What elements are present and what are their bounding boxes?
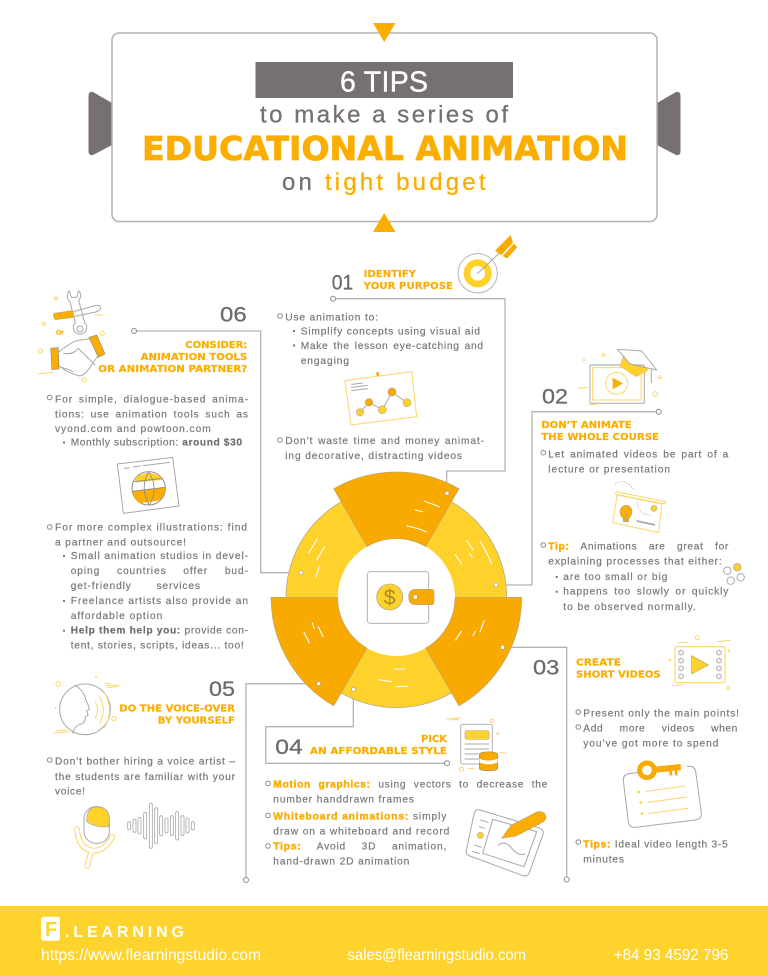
icon: tools and handshake xyxy=(39,291,105,382)
icon: browser globe xyxy=(117,457,179,513)
heading 03 xyxy=(576,658,661,680)
heading 01: IDENTIFY xyxy=(364,269,417,280)
text: complex illustrations: Help them help you: provide con- xyxy=(71,626,248,637)
icon: target with arrow xyxy=(458,235,517,293)
icon: wallet: $ xyxy=(384,586,396,610)
number 03: 03 xyxy=(533,656,559,679)
top triangle xyxy=(373,23,396,42)
heading 06: OR ANIMATION PARTNER? xyxy=(98,364,247,375)
text: simple animations: tions: use animation tools such as xyxy=(55,409,248,420)
text: don't bother: Don’t bother hiring a voice artist – xyxy=(55,757,235,768)
text: don't waste time: ing decorative, distracting videos xyxy=(285,451,462,462)
text: let animated videos: lecture or presentation xyxy=(548,464,670,475)
panel: 06 consider tools or partner xyxy=(39,291,248,652)
connector dots xyxy=(299,491,505,691)
text: styles: Whiteboard animations: simply xyxy=(273,812,447,823)
text: use animation to xyxy=(278,312,483,367)
text: don't waste time xyxy=(278,436,484,462)
text: main points: Add more videos when xyxy=(583,723,737,734)
icon: video with graduation cap xyxy=(578,349,662,405)
logo mark xyxy=(41,917,60,941)
heading 03: SHORT VIDEOS xyxy=(576,670,661,680)
text: styles: Tips: Avoid 3D animation, xyxy=(273,841,446,852)
heading 02: DON’T ANIMATE xyxy=(541,420,632,431)
icon: four dots xyxy=(724,564,744,584)
left speaker tab xyxy=(88,92,112,155)
main title: EDUCATIONAL ANIMATION xyxy=(142,129,628,168)
text: complex illustrations: tent, stories, scripts, ideas... too! xyxy=(71,641,244,652)
heading 02 xyxy=(541,420,659,443)
heading 04 xyxy=(310,734,448,757)
text: complex illustrations: oping countries offer bud- xyxy=(71,566,248,577)
heading 06 xyxy=(98,340,247,375)
panel: 03 create short videos xyxy=(533,636,739,865)
text: styles: Motion graphics: using vectors to decrease the xyxy=(273,780,548,791)
text: main points: Present only the main points! xyxy=(583,708,739,719)
text: use animation to: engaging xyxy=(301,356,349,367)
icon: chart board xyxy=(345,372,417,425)
heading 05: BY YOURSELF xyxy=(158,716,235,726)
orange segment: lower right xyxy=(426,597,522,706)
text: ideal length: Tips: Ideal video length 3-5 xyxy=(583,839,728,850)
panel: 02 don't animate the whole course xyxy=(541,349,744,613)
text: complex illustrations xyxy=(47,523,248,652)
subtitle line: to make a series of xyxy=(260,102,508,129)
text: use animation to: Simplify concepts using visual aid xyxy=(301,327,480,338)
email: sales@flearningstudio.com xyxy=(348,947,526,964)
text: complex illustrations: affordable option xyxy=(71,611,162,622)
text: don't bother xyxy=(47,757,236,798)
logo wordmark: .LEARNING xyxy=(65,924,184,941)
text: don't waste time: Don’t waste time and money animat- xyxy=(285,436,484,447)
text: tip: happens too slowly or quickly xyxy=(563,587,729,598)
text: tip: Tip: Animations are great for xyxy=(548,542,729,553)
footer band xyxy=(0,906,768,976)
text: let animated videos xyxy=(541,449,729,475)
text: simple animations: vyond.com and powtoon.com xyxy=(55,424,211,435)
text: complex illustrations: get-friendly services xyxy=(71,581,200,592)
text: simple animations: For simple, dialogue-based anima- xyxy=(55,394,248,405)
logo mark: F xyxy=(45,919,57,941)
icon: lightbulb board xyxy=(613,481,666,533)
text: complex illustrations: Small animation studios in devel- xyxy=(71,551,248,562)
text: tip: to be observed normally. xyxy=(563,602,696,613)
right speaker tab xyxy=(657,92,680,155)
white hub xyxy=(338,539,455,656)
orange segment: top xyxy=(334,472,459,547)
title: 6 tips: 6 TIPS xyxy=(340,66,428,98)
header banner xyxy=(88,23,680,232)
heading 02: THE WHOLE COURSE xyxy=(541,432,659,443)
heading 05 xyxy=(119,704,236,726)
segment highlights xyxy=(304,501,492,687)
text: ideal length: minutes xyxy=(583,854,624,865)
text: main points: you’ve got more to spend xyxy=(583,738,719,749)
connector lines xyxy=(132,296,661,882)
text: complex illustrations: Freelance artists also provide an xyxy=(71,596,248,607)
icon: key and note xyxy=(623,763,701,827)
heading 01 xyxy=(363,269,453,292)
text: styles: hand-drawn 2D animation xyxy=(273,856,409,867)
number 06: 06 xyxy=(220,304,247,327)
text: don't bother: the students are familiar with your xyxy=(55,772,236,783)
heading 04: PICK xyxy=(421,734,448,745)
heading 06: ANIMATION TOOLS xyxy=(141,352,247,363)
icon: document with coins xyxy=(447,718,505,771)
text: main points xyxy=(576,708,739,749)
heading 01: YOUR PURPOSE xyxy=(363,281,453,292)
text: tip: explaining processes that either: xyxy=(548,557,722,568)
bottom triangle xyxy=(373,213,396,232)
icon: drawing tablet and pencil xyxy=(466,810,546,876)
heading 06: CONSIDER: xyxy=(185,340,247,351)
heading 05: DO THE VOICE-OVER xyxy=(119,704,236,714)
text: simple animations: Monthly subscription: around $30 xyxy=(71,437,242,448)
phone: +84 93 4592 796 xyxy=(614,947,728,964)
central wheel xyxy=(271,472,522,708)
text: tip: are too small or big xyxy=(563,572,668,583)
number 04: 04 xyxy=(275,736,303,759)
title frame xyxy=(112,33,657,222)
icon: wallet xyxy=(367,572,434,623)
panel: 05 do the voice-over by yourself xyxy=(47,676,236,866)
panel: 04 pick an affordable style xyxy=(266,718,548,876)
text: let animated videos: Let animated videos be part of a xyxy=(548,449,729,460)
icon: speaking head xyxy=(54,676,119,735)
panel: 01 identify your purpose xyxy=(278,235,517,462)
subtitle: tight budget: on tight budget xyxy=(282,169,486,196)
text: use animation to: Use animation to: xyxy=(285,312,378,323)
orange segment: lower left xyxy=(271,597,367,706)
icon: tools and handshake: Or xyxy=(56,329,64,336)
icon: film strip with play xyxy=(669,636,730,690)
text: ideal length xyxy=(576,839,728,865)
text: tip xyxy=(541,542,729,613)
text: complex illustrations: For more complex illustrations: find xyxy=(55,523,247,534)
text: use animation to: Make the lesson eye-catching and xyxy=(301,341,483,352)
icon: sound wave xyxy=(128,803,194,848)
number 02: 02 xyxy=(542,385,568,408)
heading 03: CREATE xyxy=(576,658,621,668)
text: styles: number handdrawn frames xyxy=(273,795,414,806)
text: styles: draw on a whiteboard and record xyxy=(273,827,450,838)
text: styles xyxy=(266,780,548,867)
website: https://www.flearningstudio.com xyxy=(41,947,261,964)
icon: microphone xyxy=(77,807,112,866)
text: don't bother: voice! xyxy=(55,787,85,798)
number 05: 05 xyxy=(209,678,235,701)
yellow ring xyxy=(286,487,507,708)
title bar xyxy=(256,62,513,98)
text: complex illustrations: a partner and outsource! xyxy=(55,538,186,549)
heading 04: AN AFFORDABLE STYLE xyxy=(310,746,447,757)
text: simple animations xyxy=(47,394,248,448)
number 01: 01 xyxy=(332,271,353,294)
